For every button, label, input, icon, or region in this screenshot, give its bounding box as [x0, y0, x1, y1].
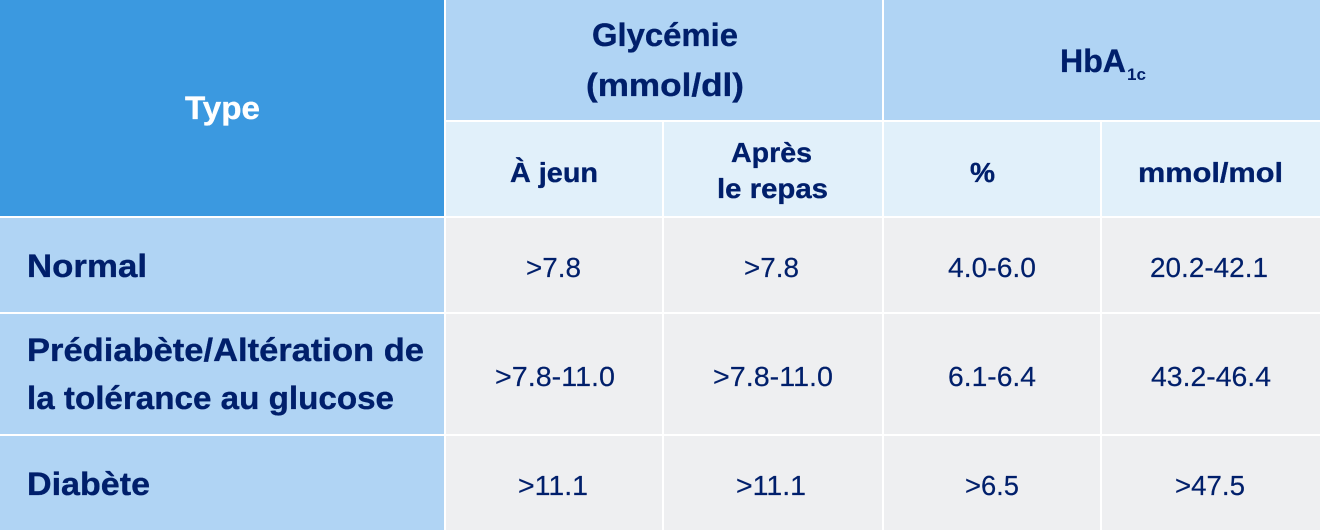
header cell: Glycémie: (mmol/dl) [586, 67, 744, 103]
header cell: Glycémie: Glycémie [592, 17, 738, 53]
subheader: percent: % [970, 157, 995, 188]
row: Diabète: >11.1 [736, 470, 806, 501]
row: Normal: >7.8 [526, 252, 581, 283]
subheader: percent [884, 122, 1100, 216]
row: Diabète: >11.1 [518, 470, 588, 501]
subheader: Après le repas: le repas [717, 173, 828, 204]
row: Diabète: >6.5 [965, 470, 1019, 501]
subheader: mmol/mol: mmol/mol [1138, 157, 1283, 188]
row: Prédiabète [0, 314, 1320, 434]
row: Prédiabète: >7.8-11.0 [495, 361, 615, 392]
row: Prédiabète: Prédiabète/Altération de [27, 332, 424, 368]
row: Diabète: Diabète [27, 466, 150, 502]
subheader: À jeun [446, 122, 662, 216]
header cell: Type: Type [185, 90, 260, 126]
header cell: HbA1c [884, 0, 1320, 120]
header cell: Glycémie [446, 0, 882, 120]
header cell: HbA1c: HbA [1060, 43, 1126, 79]
row: Prédiabète: 6.1-6.4 [948, 361, 1036, 392]
row: Normal: 20.2-42.1 [1150, 252, 1268, 283]
subheader: Après le repas [664, 122, 882, 216]
row: Normal [0, 218, 1320, 312]
row: Prédiabète: >7.8-11.0 [713, 361, 833, 392]
header cell: HbA1c: 1c [1127, 65, 1146, 84]
row: Normal: Normal [27, 248, 147, 284]
row: Diabète [0, 436, 1320, 530]
row: Normal: >7.8 [744, 252, 799, 283]
subheader: À jeun: À jeun [510, 157, 598, 188]
subheader: mmol/mol [1102, 122, 1320, 216]
row: Prédiabète: la tolérance au glucose [27, 380, 394, 416]
row: Prédiabète: 43.2-46.4 [1151, 361, 1271, 392]
row: Diabète: >47.5 [1175, 470, 1245, 501]
row: Normal: 4.0-6.0 [948, 252, 1036, 283]
header cell: Type [0, 0, 444, 216]
subheader: Après le repas: Après [731, 137, 812, 168]
